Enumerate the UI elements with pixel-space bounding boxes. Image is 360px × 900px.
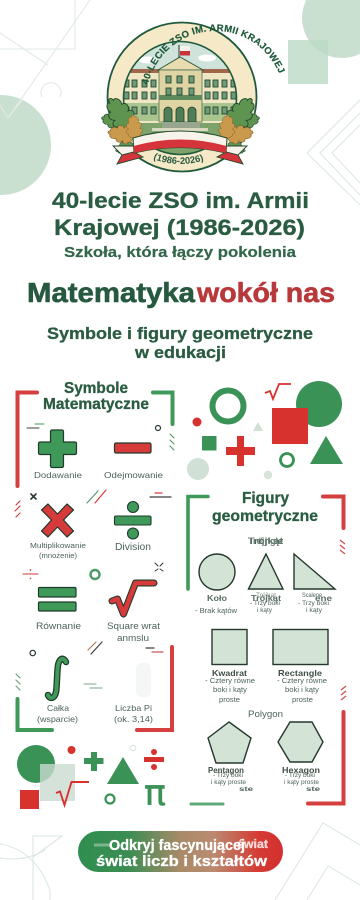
label: hexagon: Hexagon [282,765,320,775]
title: 40-lecie ZSO im. Armii [52,188,309,213]
main heading: wokół nas [196,277,335,308]
main heading: Matematyka [27,277,195,308]
label: kwadrat: boki i kąty [213,687,248,694]
shape: square [212,630,247,664]
shape: circle [199,554,235,590]
label: odejmowanie: Odejmowanie [104,470,163,480]
panel heading [43,380,149,413]
panel: symbole matematyczne [15,380,174,730]
label: trojkat [250,592,281,614]
label: scalene: i kąty [306,607,323,614]
label: pentagon: - Trzy boki [213,772,243,779]
button text: świat liczb i kształtów [96,853,267,870]
title: Krajowej (1986-2026) [54,215,305,240]
logo curved text [148,31,282,85]
shape: scalene triangle [294,554,335,589]
label: multiplikowanie: (mnożenie) [39,553,77,560]
label: multiplikowanie [30,543,86,560]
math symbols cluster: π [144,773,166,814]
label: rectangle: Rectangle [278,668,322,678]
label: calka: Całka [47,703,69,713]
icon: division [114,502,151,539]
logo [101,22,286,172]
label: kwadrat: - Cztery równe [205,678,255,685]
label: trojkat: Trójkąt [256,592,276,599]
label: rectangle [277,668,327,704]
label: square root: anmslu [117,633,149,643]
icon: equals [38,588,76,611]
title [52,188,309,240]
logo oak leaves left [100,92,143,157]
label: liczba pi [114,703,153,724]
label: square root [107,621,161,643]
label: hexagon [282,765,320,793]
subtitle: Szkoła, która łączy pokolenia [64,244,297,261]
label: division: Division [115,542,151,553]
logo years [153,159,208,164]
label: rownanie: Równanie [36,621,81,632]
label: pentagon: i kąty proste [211,779,246,786]
panel: figury geometryczne [188,490,346,804]
label: scalene: ene [315,593,332,603]
label: square root: Square wrat [107,621,161,631]
label: rectangle: proste [292,697,313,704]
section heading [47,324,313,362]
logo oak leaves right [218,92,261,157]
label: dodawanie: Dodawanie [34,470,82,480]
label: rectangle: boki i kąty [285,687,320,694]
label: hexagon: - Trzy boki [285,772,315,779]
label: trojkat: i kąty [257,607,273,614]
icon: faded pi [136,663,151,697]
label: calka: (wsparcie) [37,714,78,724]
button text: świat [237,837,268,851]
logo flag [179,45,190,58]
label: scalene: Scalene [302,592,322,599]
overlapped label: trojkat: Trójngle [248,536,283,546]
math symbols cluster [17,745,166,814]
label: polygon: Polygon [248,709,283,720]
panel heading: Matematyczne [43,396,149,413]
shape: pentagon [208,722,251,763]
panel heading: Figury [242,490,289,507]
label: kolo: - Brak kątów [195,606,238,615]
panel heading: Symbole [64,380,128,397]
label: liczba pi: Liczba Pi [115,703,152,713]
icon: square root [112,583,154,614]
label: trojkat: - Trzy boki [250,600,280,607]
icon: minus [114,443,151,453]
call to action button [78,831,283,872]
label: multiplikowanie: Multiplikowanie [30,543,86,550]
label: pentagon: ste [239,786,253,793]
label: liczba pi: (ok. 3,14) [114,714,153,724]
logo ring [108,22,256,172]
section heading: w edukacji [134,343,226,362]
label: kolo: Koło [207,593,227,603]
small decorations [15,424,174,690]
overlapped label: trojkat: Trójkąt [248,536,283,546]
shape: triangle [248,554,283,589]
button text: Odkryj fascynującej [109,837,245,854]
icon: plus [38,430,76,468]
shape: hexagon [278,722,323,762]
label: rectangle: - Cztery równe [277,678,327,685]
label: hexagon: i kąty proste [284,779,319,786]
label: scalene: - Trzy boki [298,600,329,607]
icon: multiply [42,504,74,537]
label: pentagon: Pentagon [208,765,244,775]
panel heading: geometryczne [212,508,318,525]
geometric shapes cluster [187,381,343,480]
label: hexagon: ste [306,786,320,793]
button text [96,837,268,870]
shape: rectangle [273,630,328,664]
panel heading [212,490,318,525]
section heading: Symbole i figury geometryczne [47,324,313,343]
label: kolo [195,593,238,615]
hatches [340,540,346,700]
logo scene [124,42,236,154]
label: kwadrat [205,668,255,704]
main heading [27,277,335,308]
label: kwadrat: proste [219,697,240,704]
panel frame [188,496,344,804]
label: pentagon [208,765,253,793]
icon: integral [48,659,66,698]
label: trojkat: Trójkąt [251,593,281,603]
label: kwadrat: Kwadrat [212,668,247,678]
logo: 40-LECIE ZSO IM. ARMII KRAJOWEJ [142,24,286,84]
logo ribbon [113,131,247,164]
label: calka [37,703,78,724]
label: scalene [298,592,332,614]
panel frame [18,392,172,730]
logo: (1986-2026) [154,153,204,164]
